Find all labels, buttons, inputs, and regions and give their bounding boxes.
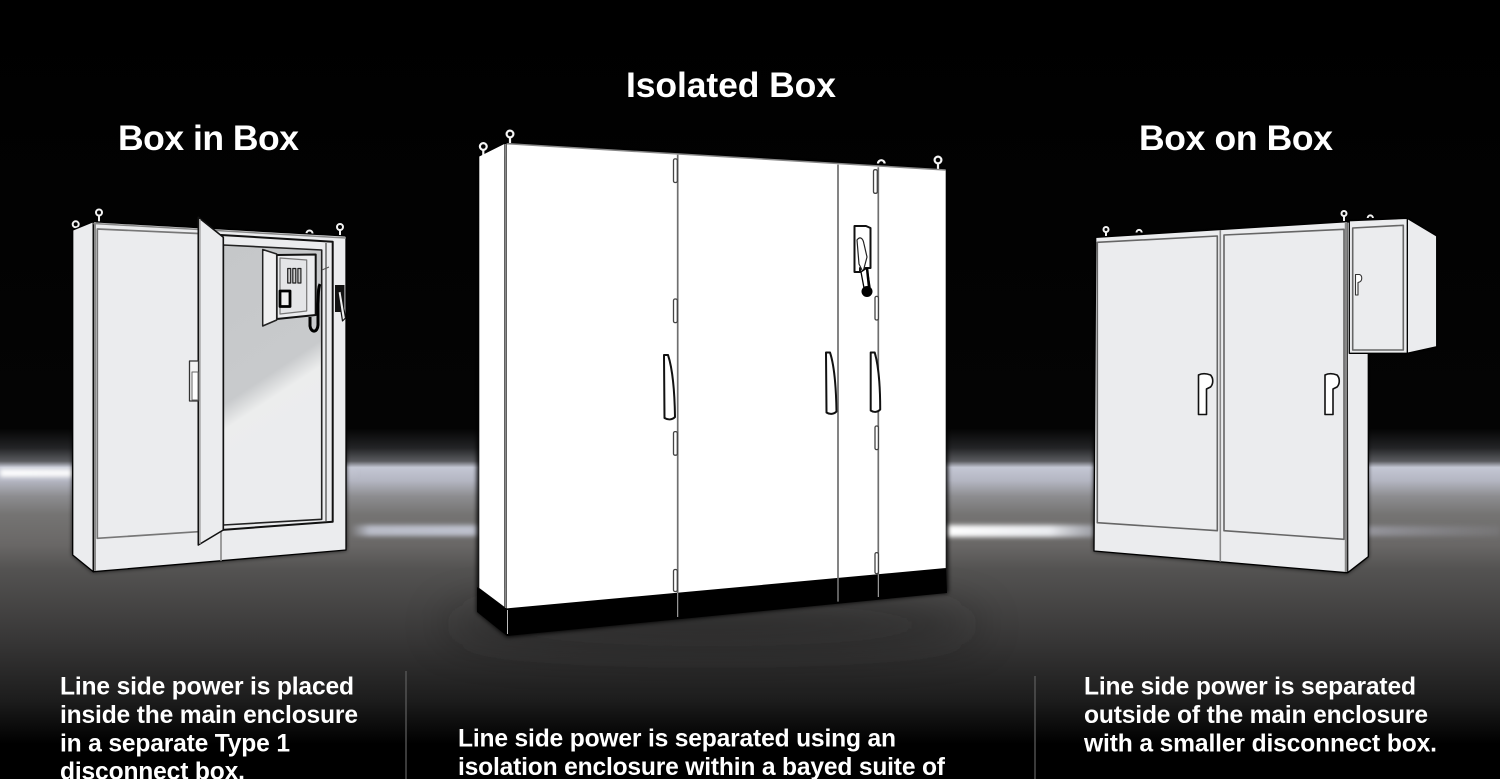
illustration: Box on Box enclosure [1094,211,1437,573]
text: Box on Box description: outside of the main enclosure [1084,702,1428,729]
closed door panel [97,229,198,538]
eye bolts [1104,211,1373,236]
side switch handle [335,285,346,321]
cabinet front [507,144,946,608]
cabinet side [479,144,504,607]
divider [405,671,407,779]
text: Box in Box description: in a separate Type 1 [60,731,290,758]
title: Box on Box: Box on Box [1139,118,1333,158]
disconnect box [263,250,316,326]
text: Box in Box description: inside the main enclosure [60,702,358,729]
text: Isolated Box description [458,726,946,779]
text: Box in Box description: Line side power is placed [60,674,354,701]
door seams [678,155,878,593]
interior back wall [223,245,322,525]
illustration: Isolated Box enclosure [477,131,948,637]
text: Box on Box description: with a smaller disconnect box. [1083,731,1437,758]
text: Isolated Box description: Line side power is separated using an [458,726,896,752]
cable [310,284,320,331]
text: Box on Box description [1083,674,1437,758]
main cabinet front [1094,222,1347,573]
cabinet side [73,222,93,572]
text: Box on Box description: Line side power is separated [1084,674,1416,701]
illustration: Box in Box enclosure [73,210,346,572]
door panels [1097,236,1217,531]
title: Isolated Box: Isolated Box [626,65,836,105]
plinth seams [508,575,878,634]
cabinet front [93,222,346,572]
door handle [190,361,198,401]
rotary disconnect switch [854,226,872,297]
side box [1349,218,1437,353]
title: Box in Box: Box in Box [118,118,299,158]
main cabinet side [1347,222,1368,573]
door opening [221,235,333,530]
eye bolts [73,210,343,236]
text: Box in Box description [60,674,358,779]
plinth [477,569,947,636]
open door [198,217,223,545]
eye bolts [480,131,941,169]
door handles [664,352,880,419]
hinges [674,159,878,592]
door handles [1198,374,1339,414]
divider [1034,676,1036,779]
